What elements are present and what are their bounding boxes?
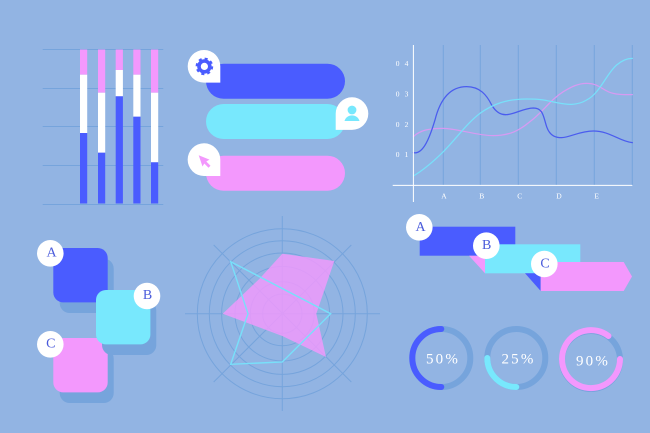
curve: cyan [413, 58, 632, 176]
bar 1 [80, 50, 87, 204]
badge B [134, 283, 160, 309]
bar 4 [133, 50, 140, 204]
x axis labels: C [517, 192, 522, 200]
x axis labels: A [441, 192, 447, 200]
square B [96, 290, 150, 344]
x axis labels: B [479, 192, 484, 200]
pill: blue [206, 64, 345, 99]
x axis labels [441, 192, 599, 200]
badge: settings gear [188, 50, 220, 83]
badge B [473, 232, 500, 259]
square C [53, 338, 108, 392]
badge: cursor [188, 143, 220, 176]
donut 25%: 25% [501, 352, 536, 368]
badge B: B [482, 238, 491, 253]
badge A: A [415, 220, 426, 235]
badge B: B [143, 288, 152, 303]
fold: blue [525, 273, 541, 291]
badge C: C [540, 256, 550, 272]
badge: user [336, 97, 368, 130]
square A shadow [60, 259, 114, 313]
pill: cyan [206, 104, 345, 139]
donut 90%: 90% [576, 354, 610, 370]
donut 50% [412, 329, 470, 387]
badge C: C [46, 336, 55, 352]
square B shadow [102, 301, 156, 355]
donut 25% [487, 329, 545, 387]
square A [53, 248, 108, 302]
ribbon A [420, 227, 515, 256]
ribbon steps [406, 214, 632, 291]
radar series: cyan outline [231, 262, 331, 364]
badge C [531, 251, 558, 277]
badge A [406, 214, 433, 241]
pill: pink [206, 156, 345, 191]
axes [393, 45, 632, 202]
curves [413, 58, 632, 176]
badge A: A [46, 246, 57, 260]
bar 2 [98, 50, 105, 204]
y axis labels [396, 59, 410, 159]
y axis labels: 0 1 [396, 150, 410, 159]
donut 90% [562, 330, 620, 389]
curve: blue [413, 87, 632, 153]
radar chart [185, 216, 380, 411]
y axis labels: 0 4 [396, 59, 410, 68]
square C shadow [60, 349, 114, 403]
ribbon C [541, 262, 632, 291]
bar 5 [151, 50, 158, 204]
curve: pink [413, 83, 632, 137]
badge A [37, 240, 64, 267]
ribbon B [485, 244, 580, 273]
vertical grid lines [443, 45, 632, 185]
donut 50%: 50% [426, 352, 460, 368]
pill list [188, 50, 368, 191]
x axis labels: E [594, 192, 599, 200]
line chart [393, 45, 632, 202]
radar series: pink area [223, 254, 334, 357]
x axis labels: D [556, 192, 562, 200]
squares A B C [37, 240, 160, 403]
y axis labels: 0 2 [396, 120, 410, 129]
stacked bar chart [43, 50, 163, 204]
badge C [37, 331, 64, 358]
radar grid [185, 216, 380, 411]
y axis labels: 0 3 [396, 90, 410, 98]
fold: pink [469, 256, 485, 273]
bar 3 [116, 50, 123, 204]
